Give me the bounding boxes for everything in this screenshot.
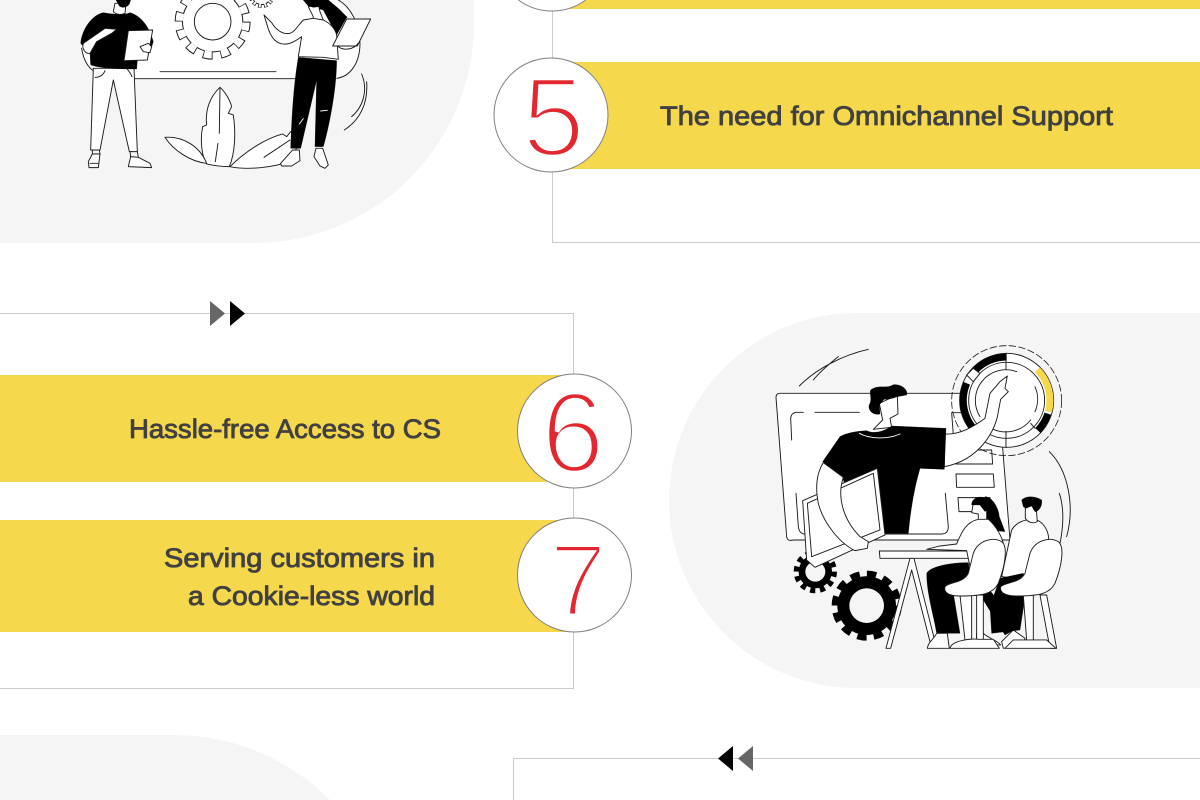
panel: item 4 frame and bar [518,0,1200,242]
seated people [927,497,1062,648]
panel: top left illustration background [0,0,474,243]
item text: Serving customers in [164,543,435,573]
panel: bottom left illustration background [0,735,330,800]
board gear [179,0,247,56]
number: 5 [522,54,585,180]
panel: right illustration background [669,313,1200,688]
board [776,393,1010,540]
number: 7 [549,523,607,638]
yellow bar [0,520,574,632]
item text: The need for Omnichannel Support [660,101,1114,131]
item text: a Cookie-less world [188,581,435,611]
board [130,0,360,78]
panel: item 7 [0,518,632,638]
panel: item 5 [494,54,1200,180]
table [879,551,973,648]
number circle [494,58,608,172]
arrows: left pointing [718,746,753,771]
yellow bar [552,62,1200,169]
panel: item 6 [0,370,632,497]
number: 6 [541,370,605,497]
man [81,0,153,168]
panel: items 6 and 7 frame [0,314,574,688]
arm [817,463,868,551]
yellow bar [0,375,574,482]
number circle [518,374,632,488]
donut chart [945,339,1068,462]
number circle [518,518,632,632]
presenter [803,376,1008,567]
laptop [803,468,885,567]
panel: next item frame [514,758,1200,800]
leaves [201,87,235,167]
illustration: two people with gears board [81,0,371,168]
item text: Hassle-free Access to CS [129,414,441,444]
arrows: right pointing [210,301,245,326]
illustration: presenter with donut chart and two seated people [776,339,1070,648]
woman [264,0,371,168]
motion lines [799,349,1070,573]
chairs [960,595,983,640]
black gears [797,553,897,636]
